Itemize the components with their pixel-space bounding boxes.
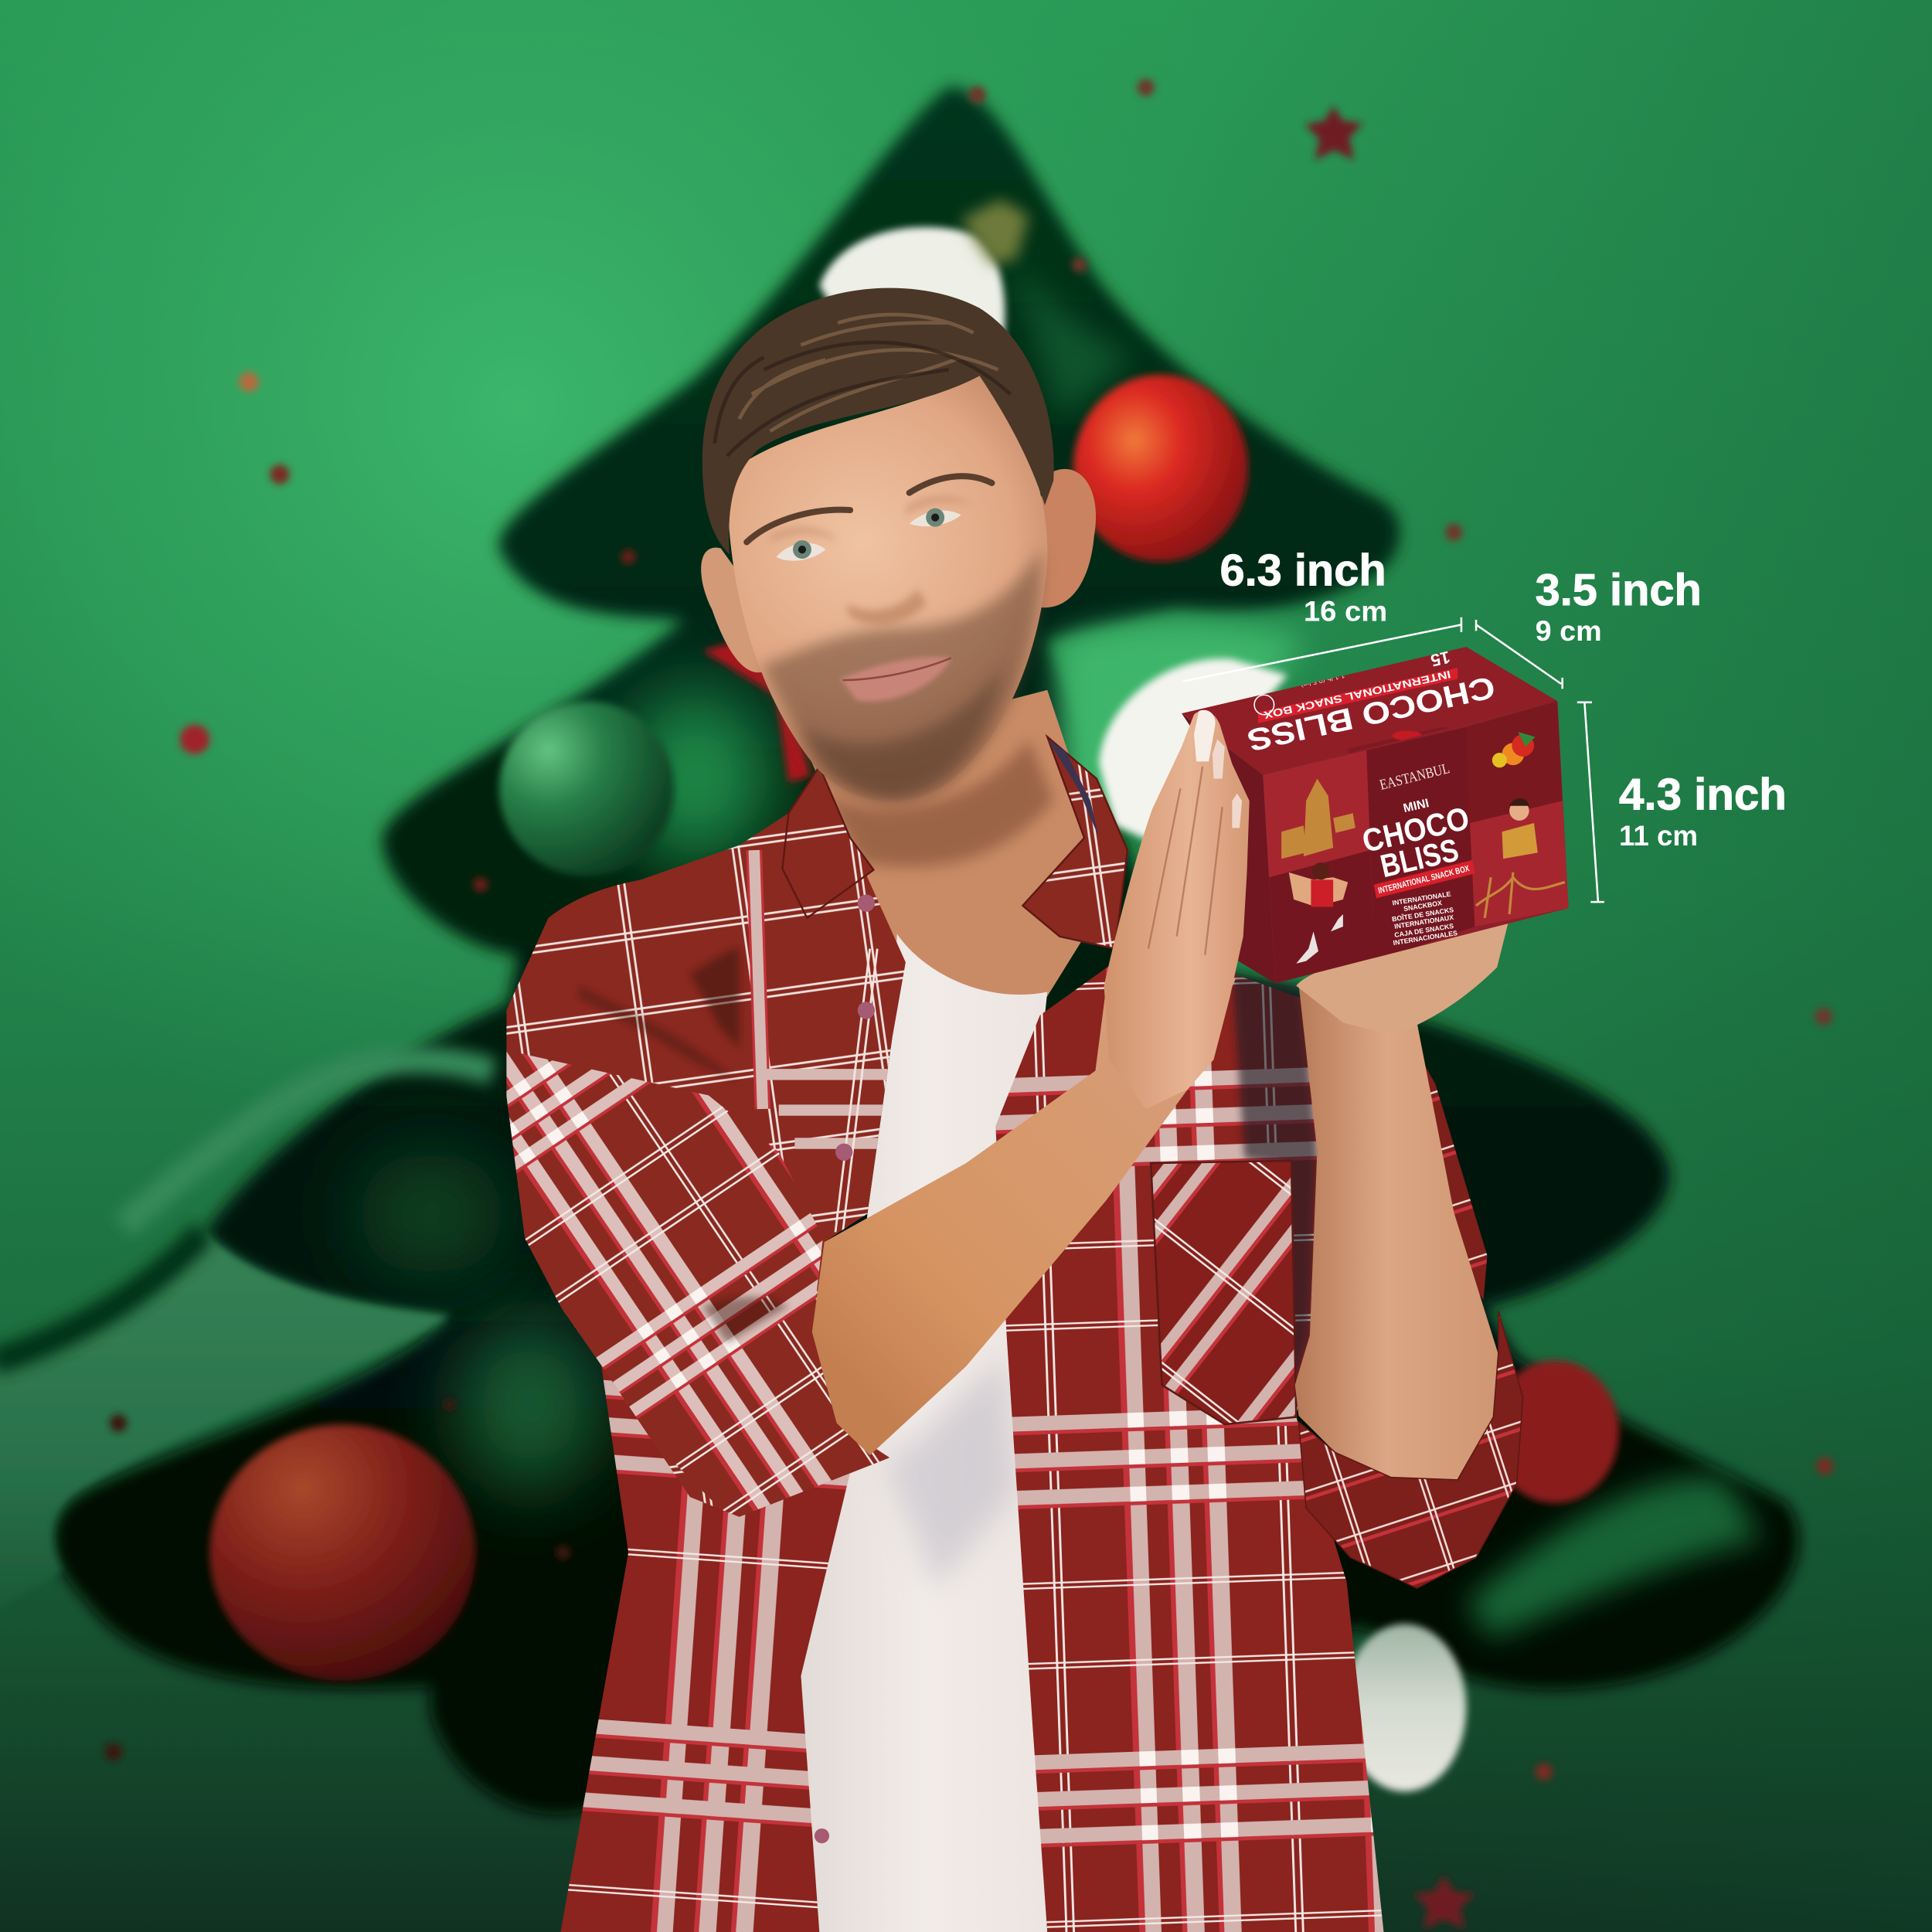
ornament: red star pieces <box>702 641 811 782</box>
icon: woman with red top <box>1289 862 1348 906</box>
translations <box>1391 890 1458 947</box>
right lower branch highlight <box>1466 1477 1762 1639</box>
ornament: white bulb lower right <box>1343 1624 1466 1791</box>
width centimetres: 9 cm <box>1536 615 1602 647</box>
box top red strip <box>1258 668 1458 723</box>
box top snack strip: INTERNATIONAL SNACK BOX <box>1263 668 1452 721</box>
man with shirt <box>493 288 1523 1932</box>
dimension: width <box>1476 566 1702 689</box>
ornament: white bulb behind hand <box>1099 658 1287 850</box>
beard stubble <box>761 549 1042 802</box>
right ear <box>1029 469 1096 607</box>
box product name <box>1359 800 1473 884</box>
box top printed name: CHOCO BLISS <box>1244 669 1498 757</box>
shadow band along curled paper <box>0 1232 203 1362</box>
lip line <box>843 658 951 680</box>
height inches: 4.3 inch <box>1619 770 1787 820</box>
hair highlights <box>740 315 998 431</box>
box product name: CHOCO <box>1359 800 1473 859</box>
length line <box>1183 617 1461 682</box>
box front face <box>1263 701 1569 983</box>
ornament: large red ball lower left <box>209 1424 475 1681</box>
translations: CAJA DE SNACKS <box>1394 922 1454 939</box>
front pattern squares <box>1263 750 1370 877</box>
star: top right <box>1304 106 1362 160</box>
width inches: 3.5 inch <box>1536 566 1702 615</box>
translations: INTERNATIONAUX <box>1394 913 1454 930</box>
face <box>727 376 1047 801</box>
ornament: green ball <box>499 701 674 876</box>
length centimetres: 16 cm <box>1304 596 1387 628</box>
translations: INTERNACIONALES <box>1393 929 1458 947</box>
raised flat hand <box>1104 710 1250 1109</box>
box top hole <box>1393 730 1422 740</box>
hair dark locks <box>715 342 1010 456</box>
translations: SNACKBOX <box>1403 899 1443 913</box>
box top face <box>1182 647 1557 775</box>
icon: seagulls <box>1296 914 1343 964</box>
left forearm <box>812 966 1236 1455</box>
icon: mango and orange <box>1492 732 1536 767</box>
t-shirt <box>801 934 1047 1932</box>
icon: buildings <box>1281 813 1355 859</box>
hair <box>702 288 1054 554</box>
dimension: length <box>1183 546 1461 682</box>
ornament: red ball upper right <box>1073 375 1248 562</box>
placket double stripe <box>835 949 877 1232</box>
nails <box>1194 710 1216 761</box>
ornaments <box>209 199 1619 1791</box>
right sleeve behind arm <box>1411 1040 1487 1300</box>
chest pocket <box>1151 1161 1296 1424</box>
eyebrows <box>747 476 992 543</box>
paper ribbon curl on the left <box>123 1060 493 1226</box>
sleeve fold shadows <box>690 949 740 1047</box>
eye socket shading <box>770 496 974 543</box>
finger separations <box>1148 767 1223 955</box>
dimension: height <box>1577 702 1787 902</box>
tree interior: mid green left of collar <box>622 690 770 862</box>
left collar <box>782 767 873 918</box>
head and face <box>701 288 1096 802</box>
box mini: MINI <box>1402 797 1430 815</box>
tree interior: mid green lower left <box>456 1318 604 1491</box>
height line <box>1577 702 1604 902</box>
translations: INTERNATIONALE <box>1392 890 1451 906</box>
left ear <box>701 548 764 672</box>
product box <box>1182 647 1569 983</box>
icon: man in yellow shirt <box>1502 798 1538 859</box>
tree interior: lit green patch right of head <box>1060 622 1306 838</box>
t-shirt shade under arm <box>887 1355 1016 1590</box>
box top count: 15 <box>1429 647 1452 670</box>
star: bottom <box>1413 1876 1475 1930</box>
nose <box>848 589 927 624</box>
shirt collar dark inner band <box>1047 740 1099 838</box>
box product name: BLISS <box>1377 832 1462 884</box>
width line <box>1476 620 1563 689</box>
shirt right torso <box>995 850 1383 1932</box>
ornament: white bulb top <box>819 199 1029 357</box>
neck shadow <box>819 740 1053 867</box>
hand under the box <box>1296 918 1509 1035</box>
lower sleeve with wide bands <box>493 1049 900 1528</box>
icon: tower <box>1304 779 1333 856</box>
icon: bridge <box>1476 872 1565 918</box>
tree interior: lit band top <box>1010 259 1134 419</box>
box left side <box>1182 713 1275 983</box>
dark shaded shirt beside arm <box>1232 974 1317 1385</box>
mouth <box>840 657 951 702</box>
red strip <box>1374 860 1475 898</box>
box top logo <box>1254 695 1274 715</box>
box top lid flap <box>1347 701 1557 774</box>
right arm forearm <box>1295 985 1498 1480</box>
tree interior: third branch lighter part <box>357 1152 505 1275</box>
eyes <box>776 509 961 561</box>
box top weight: 1.1 lb (0.5 kg) <box>1300 671 1345 689</box>
red strip: INTERNATIONAL SNACK BOX <box>1377 864 1471 896</box>
ornament: red ball lower right <box>1491 1360 1619 1503</box>
neck and chest <box>807 690 1115 1004</box>
placket horizontal bands <box>767 1074 906 1144</box>
translations: BOÎTE DE SNACKS <box>1391 905 1454 923</box>
right collar <box>1022 736 1128 949</box>
shirt left torso <box>560 1366 850 1932</box>
chin stubble darker <box>801 665 1004 798</box>
box logo: EASTANBUL <box>1378 760 1451 794</box>
paper flap under third branch <box>0 1235 450 1614</box>
length inches: 6.3 inch <box>1219 546 1386 595</box>
front pattern centre column <box>1366 727 1475 961</box>
shirt buttons <box>815 895 875 1843</box>
scattered blurred stars <box>105 79 1833 1781</box>
vertical band on chest <box>754 850 763 1109</box>
height centimetres: 11 cm <box>1619 820 1698 852</box>
shirt left chest and sleeve <box>506 814 906 1517</box>
right rolled cuff <box>1298 1311 1523 1588</box>
